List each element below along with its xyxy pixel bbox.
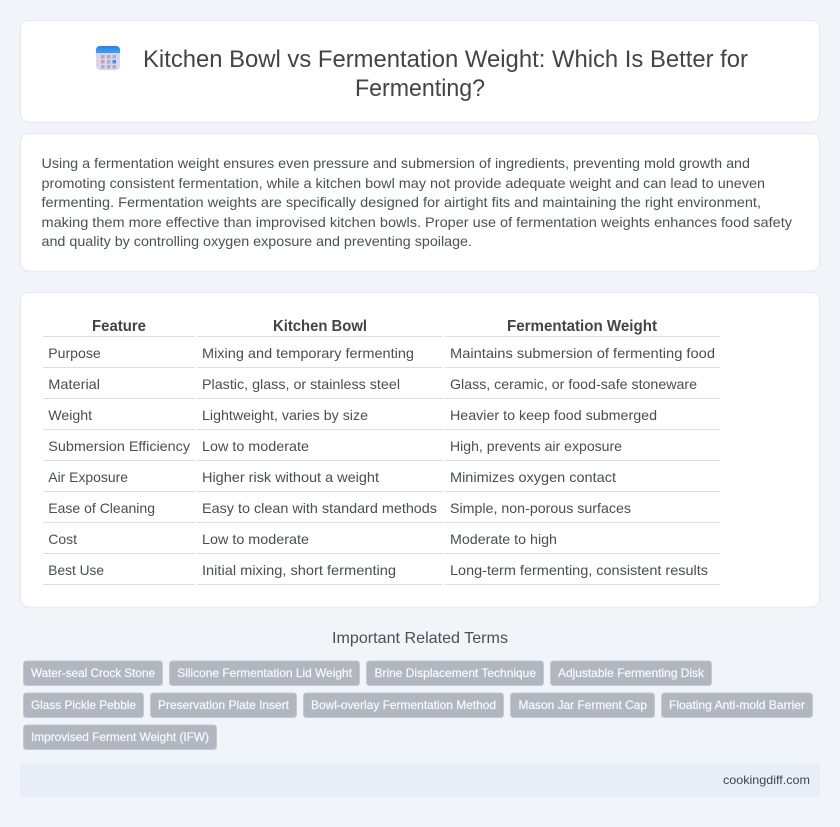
tag	[24, 725, 216, 750]
row: ease of cleaning: Simple, non-porous surfaces	[450, 500, 631, 516]
paragraph text: fermenting. Fermentation weights are specifically designed for airtight fits and maintaining the right environment,	[42, 194, 761, 210]
row: material: Plastic, glass, or stainless steel	[202, 376, 400, 392]
title	[143, 46, 748, 102]
row: submersion efficiency: Submersion Efficiency	[48, 438, 190, 454]
row: weight: Heavier to keep food submerged	[450, 407, 657, 423]
table header row	[92, 318, 658, 335]
paragraph text: and quality by controlling oxygen exposure and preventing spoilage.	[42, 233, 472, 249]
row: ease of cleaning: Easy to clean with standard methods	[202, 500, 437, 516]
icon: calendar	[96, 46, 120, 70]
table header row: Fermentation Weight	[507, 318, 658, 335]
row: air exposure: Higher risk without a weight	[202, 469, 379, 485]
row: weight: Weight	[48, 407, 92, 423]
row: submersion efficiency	[48, 438, 622, 454]
row: submersion efficiency: High, prevents air exposure	[450, 438, 622, 454]
row: cost: Moderate to high	[450, 531, 557, 547]
paragraph text	[42, 155, 792, 249]
tag: Brine Displacement Technique	[374, 666, 536, 680]
row: material	[48, 376, 697, 392]
related terms tags	[24, 661, 812, 750]
tag	[24, 661, 162, 686]
heading: important related terms: Important Related Terms	[332, 630, 508, 647]
row: cost	[48, 531, 557, 547]
footer	[20, 764, 820, 797]
row: cost: Cost	[48, 531, 77, 547]
header panel	[20, 20, 820, 122]
tag: Glass Pickle Pebble	[31, 698, 136, 712]
tag	[662, 693, 812, 718]
row: purpose	[48, 345, 715, 361]
row: air exposure: Air Exposure	[48, 469, 128, 485]
row: weight: Lightweight, varies by size	[202, 407, 368, 423]
tag	[170, 661, 360, 686]
table header row: Feature	[92, 318, 146, 335]
row: best use: Best Use	[48, 562, 104, 578]
table header row: Kitchen Bowl	[273, 318, 367, 335]
row: best use: Initial mixing, short fermenting	[202, 562, 396, 578]
panel: comparison table	[20, 292, 820, 607]
row: material: Material	[48, 376, 100, 392]
tag: Bowl-overlay Fermentation Method	[311, 698, 496, 712]
row: submersion efficiency: Low to moderate	[202, 438, 309, 454]
tag: Preservation Plate Insert	[158, 698, 290, 712]
tag: Floating Anti-mold Barrier	[669, 698, 805, 712]
row: weight	[48, 407, 657, 423]
tag: Mason Jar Ferment Cap	[518, 698, 647, 712]
paragraph text: Using a fermentation weight ensures even pressure and submersion of ingredients, preventing mold growth and	[42, 155, 750, 171]
tag	[550, 661, 712, 686]
footer source: cookingdiff.com	[723, 773, 810, 787]
row: air exposure	[48, 469, 616, 485]
tag: Silicone Fermentation Lid Weight	[177, 666, 353, 680]
row: best use	[48, 562, 708, 578]
row: material: Glass, ceramic, or food-safe stoneware	[450, 376, 697, 392]
title: Fermenting?	[355, 75, 485, 102]
title: Kitchen Bowl vs Fermentation Weight: Which Is Better for	[143, 46, 748, 73]
row: air exposure: Minimizes oxygen contact	[450, 469, 616, 485]
tag	[24, 693, 144, 718]
row: ease of cleaning	[48, 500, 631, 516]
row: purpose: Mixing and temporary fermenting	[202, 345, 414, 361]
tag	[510, 693, 654, 718]
panel: summary paragraph	[20, 134, 820, 271]
row: best use: Long-term fermenting, consistent results	[450, 562, 708, 578]
tag	[366, 661, 544, 686]
tag: Adjustable Fermenting Disk	[558, 666, 705, 680]
row: purpose: Maintains submersion of fermenting food	[450, 345, 715, 361]
tag: Improvised Ferment Weight (IFW)	[31, 730, 209, 744]
row: ease of cleaning: Ease of Cleaning	[48, 500, 155, 516]
tag: Water-seal Crock Stone	[31, 666, 155, 680]
paragraph text: making them more effective than improvised kitchen bowls. Proper use of fermentation weights enhances food safety	[42, 214, 792, 230]
tag	[150, 693, 296, 718]
paragraph text: promoting consistent fermentation, while a kitchen bowl may not provide adequate weight and can lead to uneven	[42, 175, 765, 191]
tag	[304, 693, 504, 718]
row: purpose: Purpose	[48, 345, 101, 361]
row: cost: Low to moderate	[202, 531, 309, 547]
